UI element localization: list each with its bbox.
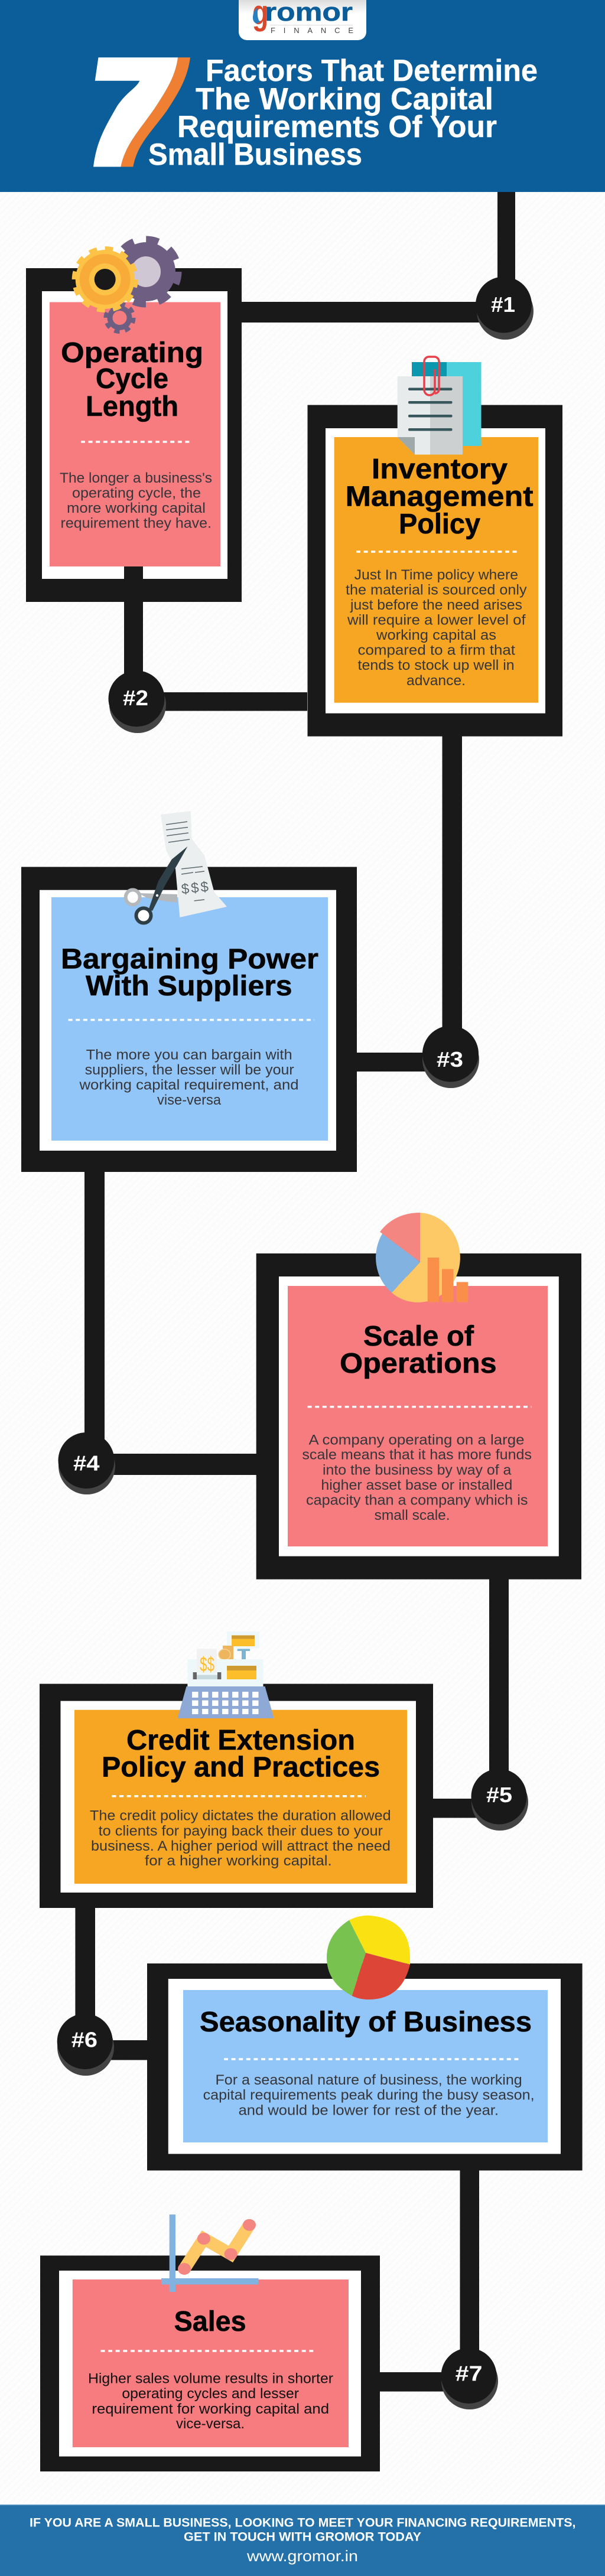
heading: scale of operations: Scale of [363,1321,474,1352]
connector: header to #1 to panel 1 [242,192,515,323]
text: operating cycle body: more working capital [67,500,206,516]
text: operating cycle body [60,470,212,532]
heading: operating cycle length: Cycle [96,363,168,395]
text: credit body: for a higher working capital. [145,1853,332,1869]
text: inventory body: the material is sourced only [346,582,527,598]
heading: inventory management policy: Management [346,481,534,512]
footer website: www.gromor.in [246,2547,358,2565]
heading: credit extension policy and practices [102,1725,380,1783]
heading: operating cycle length [61,337,203,422]
node: #1 [476,276,534,340]
text: sales body: requirement for working capital and [92,2401,329,2417]
icon: gears [74,240,178,331]
logo: gromor finance [239,0,366,40]
panel: inventory management policy [307,405,562,737]
text: scale body [302,1432,532,1523]
heading: credit extension policy and practices: Credit Extension [126,1725,355,1756]
text: operating cycle body: requirement they have. [60,516,212,532]
title: The Working Capital [196,82,493,116]
node: #7: #7 [456,2362,482,2385]
icon: line chart [161,2214,259,2292]
node: #6: #6 [71,2028,97,2052]
connector: panel 6 to #7 to panel 7 [380,2170,479,2392]
footer banner [0,2505,605,2576]
text: inventory body: working capital as [376,627,496,643]
node: #2 [109,670,166,733]
text: seasonality body [203,2072,535,2118]
text: operating cycle body: operating cycle, the [72,486,201,501]
text: inventory body: just before the need arises [350,597,522,613]
text: credit body: business. A higher period will attract the need [91,1838,391,1854]
panel: operating cycle length [26,268,242,602]
text: seasonality body: and would be lower for rest of the year. [239,2102,499,2118]
text: inventory body: Just In Time policy where [354,567,518,583]
node: #1: #1 [491,292,515,317]
panel: bargaining power with suppliers [21,867,357,1172]
heading: bargaining power with suppliers: Bargaining Power [61,943,318,975]
text: scale body: into the business by way of a [323,1462,512,1478]
text: inventory body [346,567,527,689]
icon: credit card machine: $$ [200,1653,214,1676]
text: inventory body: tends to stock up well in [358,657,515,673]
text: inventory body: compared to a firm that [358,643,515,658]
node: #2: #2 [123,686,148,710]
text: sales body: Higher sales volume results in shorter [88,2370,333,2386]
text: bargaining body: The more you can bargain with [86,1047,292,1063]
text: scale body: scale means that it has more funds [302,1447,532,1463]
icon: pie and bar chart [376,1213,468,1302]
big numeral 7 [93,57,190,167]
text: credit body [90,1808,391,1869]
text: sales body [88,2370,333,2432]
text: bargaining body: working capital requirement, and [79,1077,298,1093]
heading: bargaining power with suppliers [61,943,318,1002]
heading: scale of operations [340,1321,497,1379]
text: scale body: higher asset base or installed [321,1477,512,1493]
icon: scissors cutting receipt [126,811,227,923]
icon: scissors cutting receipt: $$$ [181,879,209,897]
heading: bargaining power with suppliers: With Suppliers [86,971,292,1002]
title [148,54,538,172]
text: credit body: to clients for paying back their dues to your [99,1823,383,1839]
icon: credit card machine [177,1631,274,1718]
heading: credit extension policy and practices: Policy and Practices [102,1752,380,1783]
panel: sales [40,2255,380,2471]
node: #5: #5 [486,1783,512,1807]
panel: seasonality of business [147,1963,583,2170]
node: #5 [471,1769,528,1831]
text: sales body: operating cycles and lesser [122,2386,299,2402]
text: sales body: vice-versa. [176,2416,245,2432]
heading: operating cycle length: Operating [61,337,203,369]
node: #6 [57,2014,114,2076]
text: scale body: capacity than a company which is [306,1492,528,1508]
heading: sales: Sales [174,2306,246,2337]
heading: scale of operations: Operations [340,1348,497,1379]
node: #3 [422,1025,479,1088]
logo: gromor finance: FINANCE [271,26,353,35]
connector: panel 4 to #5 to panel 5 [433,1579,509,1818]
heading: inventory management policy: Policy [399,509,480,540]
panel: credit extension policy [40,1684,433,1908]
heading: inventory management policy [346,454,534,540]
heading: operating cycle length: Length [86,391,178,422]
text: inventory body: advance. [406,673,466,689]
text: seasonality body: capital requirements peak during the busy season, [203,2087,535,2103]
title: Factors That Determine [206,54,538,88]
node: #4: #4 [73,1451,99,1476]
icon: documents with paperclip [398,357,481,455]
heading: seasonality of business: Seasonality of Business [200,2007,532,2038]
footer call to action: GET IN TOUCH WITH GROMOR TODAY [184,2530,421,2544]
title: Small Business [148,138,362,172]
text: bargaining body: suppliers, the lesser will be your [85,1062,294,1078]
text: bargaining body [79,1047,298,1108]
footer call to action [30,2516,575,2544]
title: Requirements Of Your [177,110,497,144]
text: scale body: small scale. [375,1507,450,1523]
connector: panel 2 to #3 to panel 3 [357,736,462,1072]
text: scale body: A company operating on a large [308,1432,525,1448]
text: bargaining body: vise-versa [157,1092,222,1108]
node: #4 [58,1432,115,1494]
heading: inventory management policy: Inventory [372,454,508,485]
header banner [0,0,605,192]
icon: seasonal pie chart [327,1916,410,1999]
text: seasonality body: For a seasonal nature of business, the working [215,2072,522,2088]
connector: panel 1 to #2 to panel 2 [124,566,307,711]
connector: panel 3 to #4 to panel 4 [84,1172,256,1475]
text: operating cycle body: The longer a business's [60,470,212,486]
connector: panel 5 to #6 to panel 6 [75,1908,147,2060]
node: #3: #3 [437,1047,463,1072]
text: credit body: The credit policy dictates the duration allowed [90,1808,391,1824]
text: inventory body: will require a lower level of [347,612,526,628]
node: #7 [441,2348,498,2409]
panel: scale of operations [256,1253,581,1580]
footer call to action: IF YOU ARE A SMALL BUSINESS, LOOKING TO MEET YOUR FINANCING REQUIREMENTS, [30,2516,575,2530]
